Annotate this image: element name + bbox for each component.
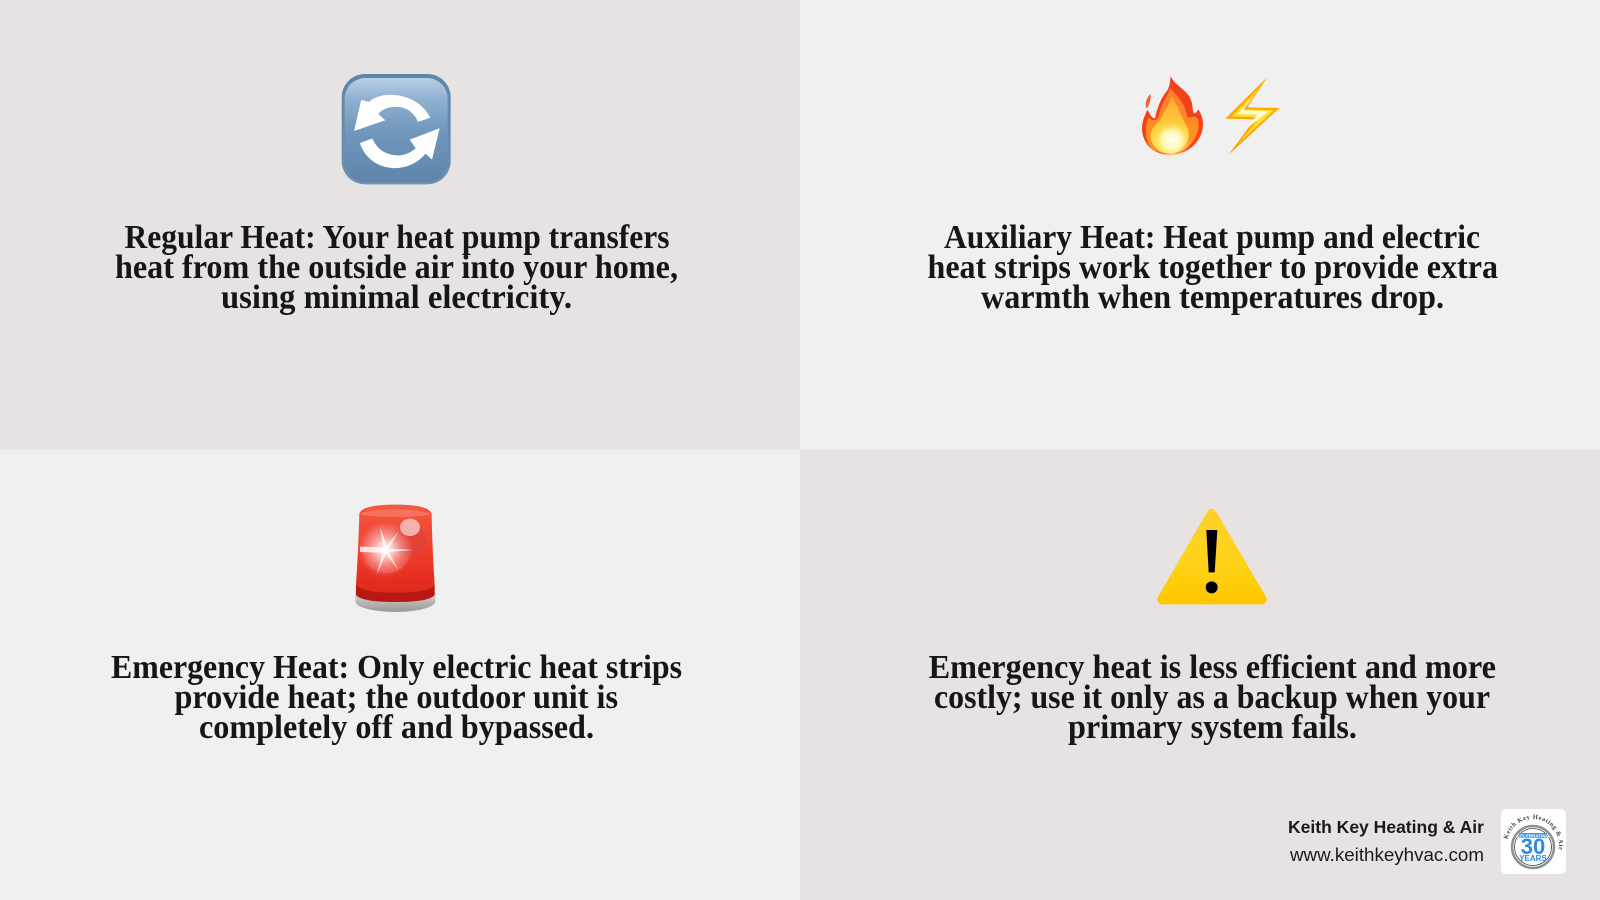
panel: emergency heat [0,450,800,900]
panel: auxiliary heat [800,0,1600,450]
logo: 30 years badge: YEARS [1519,854,1547,863]
heading: regular heat text [115,219,678,316]
heading: emergency heat text: provide heat; the outdoor unit is [174,679,618,716]
heading: regular heat text: using minimal electricity. [221,279,572,316]
logo: 30 years badge: Keith Key Heating & Air [1503,814,1564,850]
heading: warning text [929,649,1496,746]
heading: emergency heat text [111,649,682,746]
heading: auxiliary heat text: Auxiliary Heat: Heat pump and electric [944,219,1480,256]
icon: warning sign [1162,514,1262,599]
brand name: Keith Key Heating & Air [1288,817,1484,837]
heading: auxiliary heat text: warmth when temperatures drop. [981,279,1444,316]
panel: emergency warning [800,450,1600,900]
logo: 30 years badge: 30 [1521,834,1545,859]
heading: auxiliary heat text [928,219,1498,316]
heading: warning text: Emergency heat is less efficient and more [929,649,1496,686]
icon: rotating light [355,505,435,612]
heading: emergency heat text: Emergency Heat: Only electric heat strips [111,649,682,686]
icon: fire [1142,76,1203,159]
heading: auxiliary heat text: heat strips work together to provide extra [928,249,1498,286]
heading: regular heat text: Regular Heat: Your heat pump transfers [124,219,670,256]
heading: emergency heat text: completely off and bypassed. [199,709,594,746]
icon: lightning bolt [1225,77,1279,155]
heading: regular heat text: heat from the outside air into your home, [115,249,678,286]
icon: cycle arrows [342,74,451,184]
panel: regular heat [0,0,800,450]
website: www.keithkeyhvac.com [1289,845,1484,865]
logo: 30 years badge: CELEBRATING [1517,833,1550,838]
heading: warning text: primary system fails. [1068,709,1357,746]
logo: 30 years badge [1501,809,1566,874]
heading: warning text: costly; use it only as a backup when your [934,679,1490,716]
